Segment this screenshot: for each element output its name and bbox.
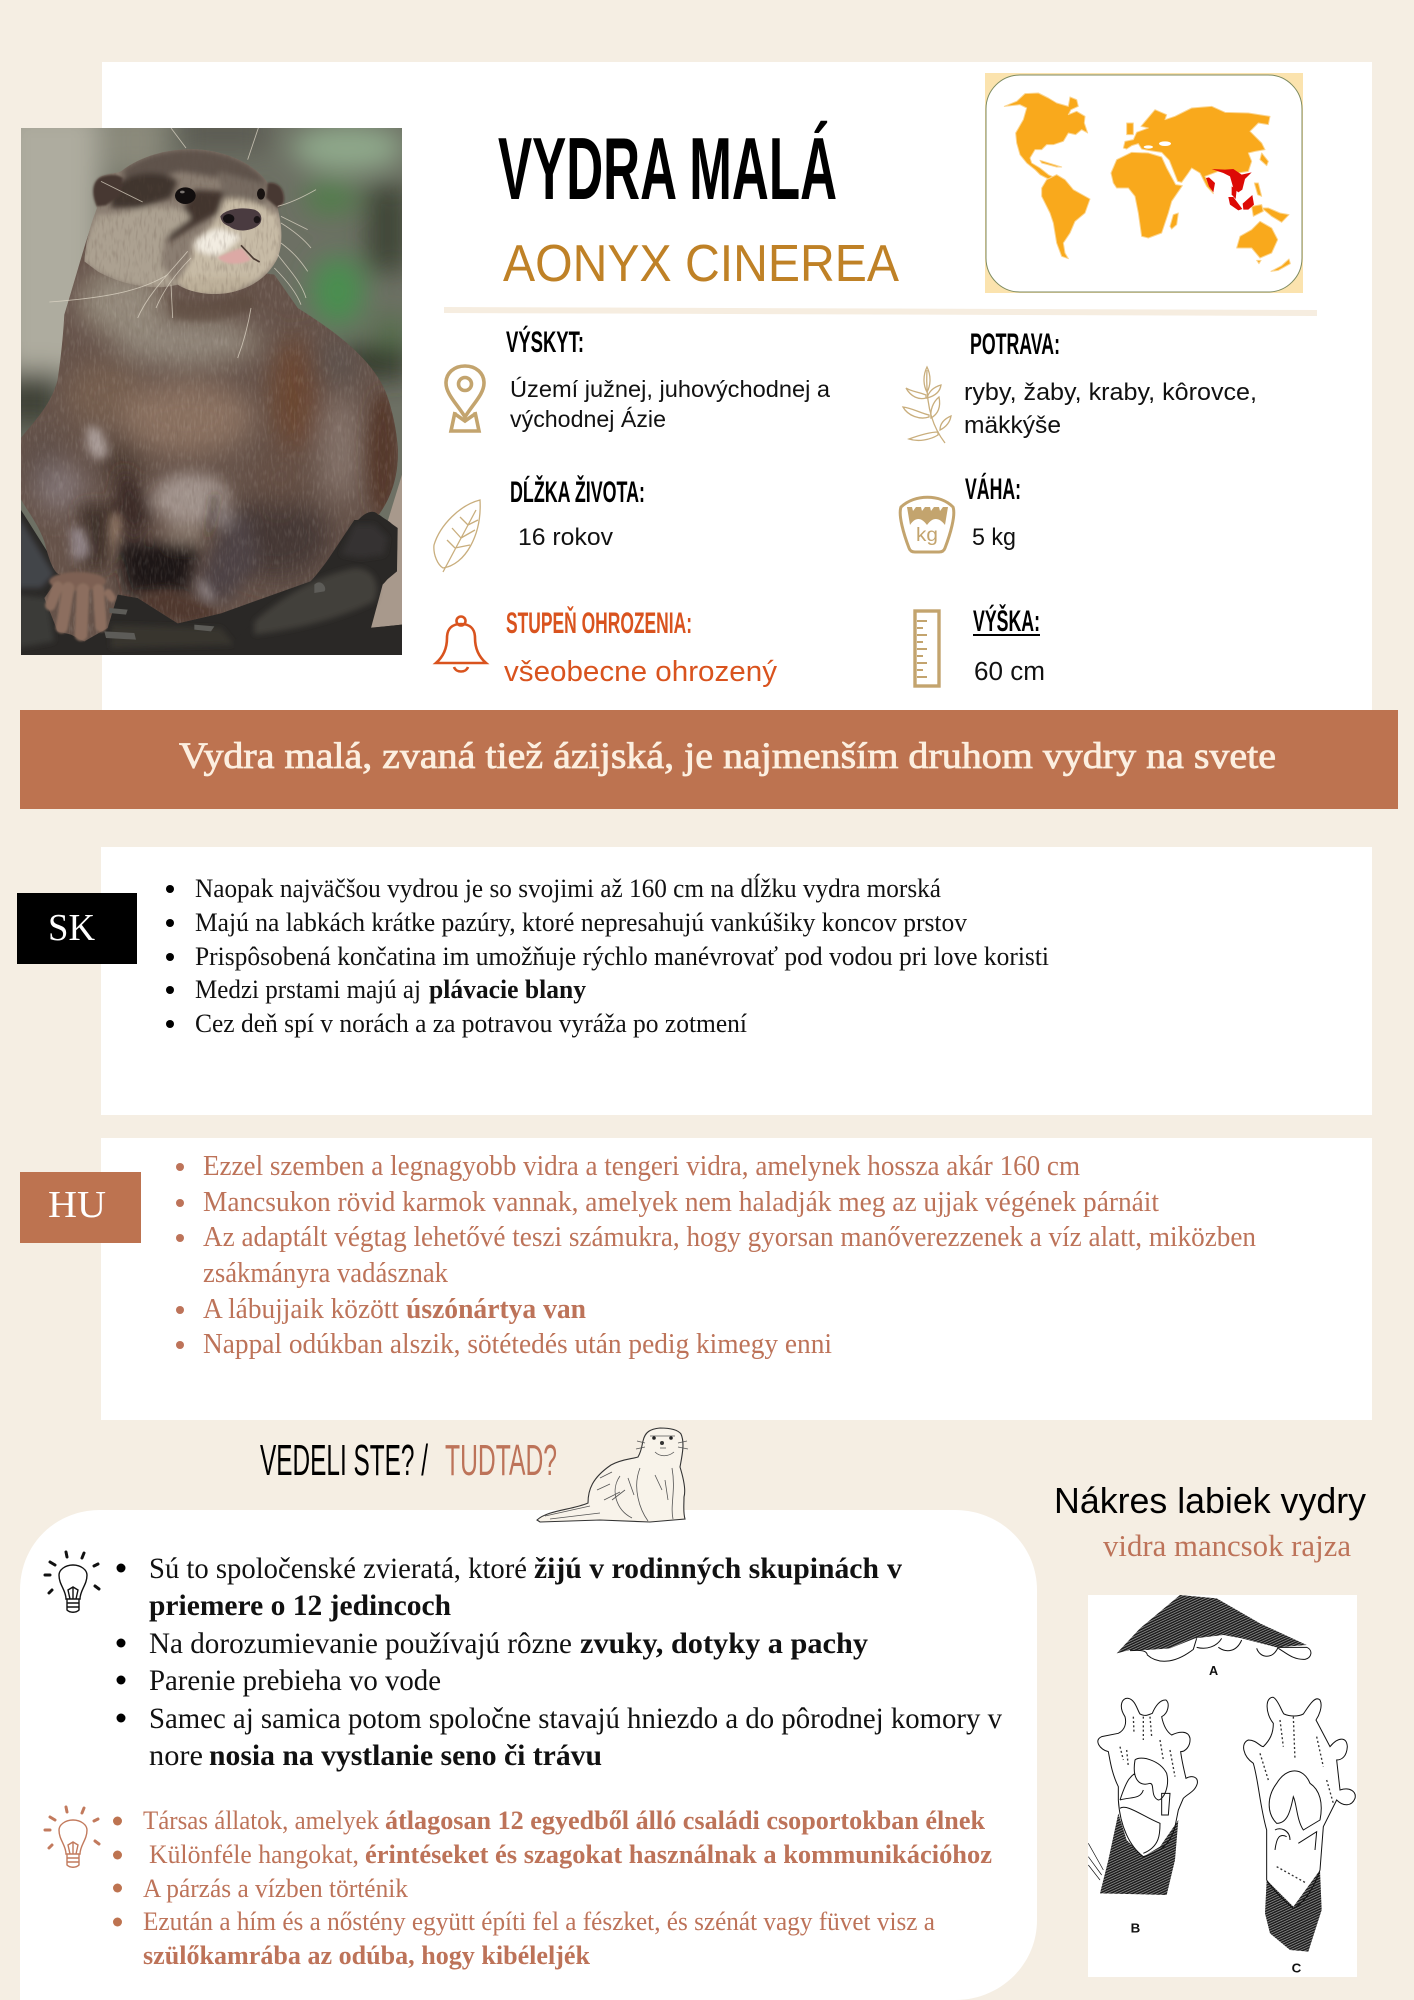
- fact: potrava: mäkkýše: [964, 412, 1061, 439]
- panel: SK facts: Majú na labkách krátke pazúry, ktoré nepresahujú vankúšiky koncov prstov: [195, 908, 967, 937]
- text: SK did you know: Sú to spoločenské zvieratá, ktoré: [149, 1552, 527, 1585]
- fact: stupeň ohrozenia: všeobecne ohrozený: [504, 656, 777, 688]
- icon: ruler: [915, 611, 939, 686]
- chin shadow: [168, 291, 254, 321]
- heading: did you know: TUDTAD?: [445, 1437, 557, 1485]
- fact: stupeň ohrozenia: [504, 606, 777, 688]
- text: SK did you know: priemere o 12 jedincoch: [149, 1589, 451, 1622]
- banner: [20, 710, 1398, 809]
- tag: SK: SK: [48, 907, 96, 949]
- text: HU did you know: Különféle hangokat,: [149, 1839, 359, 1869]
- heading: paw drawing: Nákres labiek vydry: [1054, 1480, 1366, 1521]
- text: HU did you know: Ezután a hím és a nőstény együtt építi fel a fészket, és szénát vagy füvet visz a: [143, 1906, 935, 1936]
- left forepaw: [49, 572, 112, 635]
- heading: did you know: VEDELI STE? /: [260, 1437, 428, 1485]
- text: SK did you know: Na dorozumievanie používajú rôzne: [149, 1627, 572, 1660]
- panel: HU facts: [101, 1138, 1372, 1420]
- icon: map pin: [446, 366, 484, 431]
- text: HU did you know: szülőkamrába az odúba, hogy kibéleljék: [143, 1940, 590, 1970]
- fact: dĺžka života: DĹŽKA ŽIVOTA:: [510, 475, 645, 509]
- text: SK did you know: Parenie prebieha vo vode: [149, 1664, 441, 1697]
- mouth: [218, 249, 251, 264]
- text: HU did you know: átlagosan 12 egyedből álló családi csoportokban élnek: [385, 1805, 985, 1835]
- panel: SK facts: [101, 847, 1372, 1115]
- text: HU did you know: Társas állatok, amelyek: [143, 1805, 380, 1835]
- text: HU did you know: [113, 1805, 992, 1970]
- text: SK did you know: nosia na vystlanie seno či trávu: [209, 1739, 602, 1772]
- fact: váha: VÁHA:: [965, 472, 1021, 506]
- panel: species profile: [102, 62, 1372, 712]
- banner: Vydra malá, zvaná tiež ázijská, je najmenším druhom vydry na svete: [179, 736, 1276, 777]
- paw B: B: [1131, 1921, 1141, 1936]
- text: SK did you know: Samec aj samica potom spoločne stavajú hniezdo a do pôrodnej komory v: [149, 1702, 1002, 1735]
- panel: SK facts: Medzi prstami majú aj: [195, 975, 421, 1004]
- illustration: otter paws: [1088, 1595, 1357, 1977]
- fact: výskyt: Území južnej, juhovýchodnej a: [510, 376, 831, 402]
- panel: SK facts: Prispôsobená končatina im umožňuje rýchlo manévrovať pod vodou pri love koristi: [195, 942, 1049, 971]
- world map: [985, 73, 1303, 293]
- fact: dĺžka života: [510, 475, 645, 551]
- icon: light bulb terracotta: [45, 1807, 99, 1867]
- text: HU did you know: A párzás a vízben történik: [143, 1873, 409, 1903]
- subtitle: latin name: AONYX CINEREA: [503, 235, 899, 293]
- text: HU did you know: érintéseket és szagokat használnak a kommunikációhoz: [365, 1839, 992, 1869]
- photo: otter: [1, 108, 408, 655]
- right ear: [266, 183, 284, 208]
- fact: výška: [973, 604, 1045, 686]
- eyes: [175, 187, 196, 204]
- paw A: A: [1209, 1664, 1218, 1678]
- panel: HU facts: Nappal odúkban alszik, sötétedés után pedig kimegy enni: [203, 1329, 832, 1360]
- fact: potrava: POTRAVA:: [970, 328, 1060, 361]
- panel: HU facts: Mancsukon rövid karmok vannak, amelyek nem haladják meg az ujjak végének párnáit: [203, 1187, 1159, 1218]
- panel: HU facts: zsákmányra vadásznak: [203, 1258, 448, 1289]
- fact: výskyt: VÝSKYT:: [506, 325, 584, 359]
- fact: potrava: [964, 328, 1257, 439]
- text: SK did you know: zvuky, dotyky a pachy: [580, 1627, 868, 1660]
- icon: light bulb: [45, 1552, 99, 1612]
- head: [84, 149, 284, 294]
- divider: [444, 307, 1317, 316]
- illustration: otter sketch: [537, 1428, 688, 1522]
- fact: stupeň ohrozenia: STUPEŇ OHROZENIA:: [506, 606, 692, 640]
- whiskers: [49, 128, 316, 358]
- paw B: [1088, 1698, 1197, 1936]
- paw A: [1117, 1595, 1311, 1678]
- fact: váha: [965, 472, 1021, 551]
- ground: [371, 475, 402, 628]
- rock over body: [104, 512, 402, 655]
- fact: výška: 60 cm: [974, 658, 1045, 686]
- icon: kg weight: [900, 497, 954, 552]
- fact: potrava: ryby, žaby, kraby, kôrovce,: [964, 379, 1257, 406]
- tag: HU: HU: [48, 1184, 106, 1226]
- tag: HU: [20, 1172, 141, 1243]
- text: SK did you know: v: [887, 1552, 902, 1585]
- otter body: [19, 208, 398, 641]
- paw C: [1244, 1697, 1355, 1976]
- heading: paw drawing: [1054, 1480, 1366, 1563]
- panel: SK facts: Cez deň spí v norách a za potravou vyráža po zotmení: [195, 1009, 747, 1038]
- fact: výskyt: východnej Ázie: [510, 406, 666, 432]
- title: VYDRA MALÁ: [498, 119, 837, 218]
- icon: kg weight: kg: [916, 525, 938, 546]
- icon: bell: [436, 616, 486, 672]
- fact: váha: 5 kg: [972, 524, 1016, 551]
- panel: HU facts: Az adaptált végtag lehetővé teszi számukra, hogy gyorsan manőverezzenek a víz alatt, miközben: [203, 1222, 1256, 1253]
- panel: SK facts: plávacie blany: [429, 975, 586, 1004]
- panel: HU facts: Ezzel szemben a legnagyobb vidra a tengeri vidra, amelynek hossza akár 160 cm: [203, 1151, 1080, 1182]
- tag: SK: [17, 893, 137, 964]
- text: SK did you know: nore: [149, 1739, 203, 1772]
- panel: did you know: [20, 1510, 1037, 2000]
- fact: výskyt: [506, 325, 831, 432]
- fact: výška: VÝŠKA:: [973, 604, 1040, 638]
- paw C: C: [1292, 1961, 1302, 1976]
- icon: foliage: [903, 367, 951, 443]
- panel: HU facts: A lábujjaik között: [203, 1294, 399, 1325]
- text: SK did you know: žijú v rodinných skupinách: [534, 1552, 879, 1585]
- fact: dĺžka života: 16 rokov: [518, 524, 614, 551]
- nose: [220, 208, 261, 230]
- left ear: [93, 175, 123, 206]
- panel: HU facts: úszónártya van: [406, 1294, 586, 1325]
- heading: paw drawing: vidra mancsok rajza: [1103, 1528, 1351, 1563]
- text: SK did you know: [116, 1552, 1002, 1772]
- icon: leaf: [434, 500, 480, 572]
- panel: SK facts: Naopak najväčšou vydrou je so svojimi až 160 cm na dĺžku vydra morská: [195, 874, 941, 903]
- rock base: [18, 505, 402, 655]
